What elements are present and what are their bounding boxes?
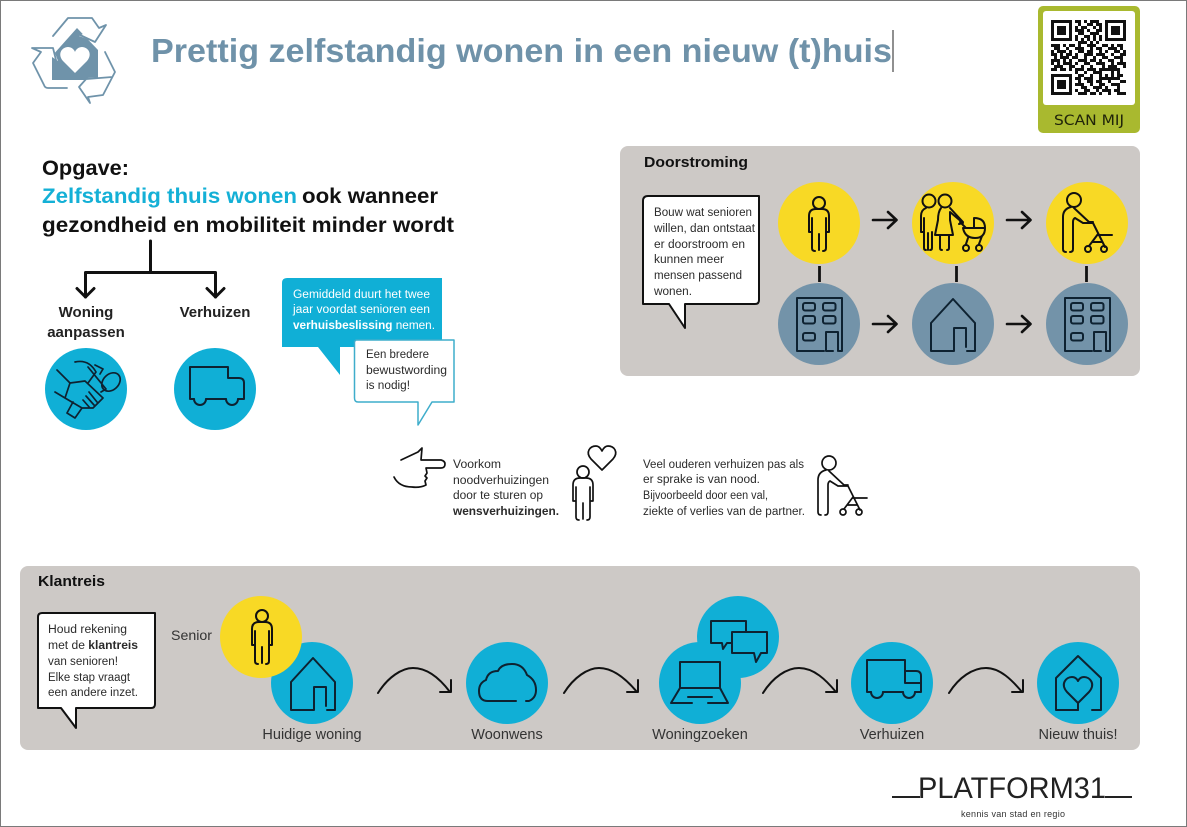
icon: senior person — [220, 596, 302, 678]
text: veel ouderen verhuizen: Veel ouderen verhuizen pas als — [643, 459, 804, 471]
arrows: customer journey — [378, 668, 1023, 693]
callout: verhuisbeslissing — [282, 278, 442, 375]
step: woonwens: Woonwens — [471, 727, 543, 743]
arrows: life stages and housing — [873, 212, 1030, 332]
callout: bouw wat senioren: mensen passend — [654, 270, 742, 282]
text: veel ouderen verhuizen: Bijvoorbeeld door een val, — [643, 490, 768, 502]
icon: pointing hand — [394, 448, 445, 487]
callout: verhuisbeslissing: jaar voordat senioren een — [292, 304, 430, 316]
logo: platform31 — [892, 772, 1132, 819]
text: voorkom noodverhuizingen: door te sturen op — [453, 490, 543, 502]
callout: bouw wat senioren: er doorstroom en — [654, 239, 745, 251]
step: verhuizen — [851, 642, 933, 743]
title: Prettig zelfstandig wonen in een nieuw (t)huis — [151, 32, 892, 69]
text: voorkom noodverhuizingen: noodverhuizingen — [453, 475, 549, 487]
icon: recycling house logo — [32, 18, 115, 103]
heading: klantreis: Klantreis — [38, 574, 105, 590]
callout: bouw wat senioren: willen, dan ontstaat — [653, 223, 756, 235]
icon: house — [912, 283, 994, 365]
icon: elderly with walker — [1046, 182, 1128, 264]
callout: houd rekening: een andere inzet. — [48, 687, 138, 699]
callout: houd rekening: met de klantreis — [48, 640, 138, 652]
arrow: tree branching to two options — [77, 241, 224, 297]
icon: person with heart — [573, 446, 616, 520]
text: veel ouderen verhuizen — [643, 459, 805, 518]
connectors between rows — [820, 266, 1086, 282]
text: veel ouderen verhuizen: ziekte of verlies van de partner. — [643, 506, 805, 518]
callout: bouw wat senioren — [643, 196, 759, 328]
text: voorkom noodverhuizingen: Voorkom — [453, 459, 501, 471]
icon: elderly with walker — [818, 456, 867, 515]
step: woningzoeken — [652, 596, 779, 743]
QR code card — [1038, 6, 1140, 133]
callout: houd rekening: Elke stap vraagt — [48, 672, 131, 684]
logo: platform31: kennis van stad en regio — [961, 809, 1065, 819]
callout: bouw wat senioren: Bouw wat senioren — [654, 207, 752, 219]
heading: ook wanneer: ook wanneer — [302, 185, 438, 208]
panel: doorstroming — [620, 146, 1140, 376]
icon: apartment building — [778, 283, 860, 365]
logo: platform31: PLATFORM31 — [918, 772, 1106, 805]
text cursor — [892, 30, 894, 72]
callout: bouw wat senioren: kunnen meer — [654, 254, 724, 266]
callout: houd rekening: Houd rekening — [48, 624, 127, 636]
callout: verhuisbeslissing: verhuisbeslissing nemen. — [293, 320, 435, 332]
step: verhuizen: Verhuizen — [860, 727, 924, 743]
icon: single person — [778, 182, 860, 264]
callout: houd rekening: van senioren! — [48, 656, 118, 668]
callout: houd rekening — [38, 613, 155, 728]
icon: apartment building 2 — [1046, 283, 1128, 365]
heading: Opgave: Opgave: — [42, 157, 129, 180]
label: woning aanpassen: Woning — [59, 304, 113, 321]
callout: bouw wat senioren: wonen. — [653, 286, 692, 298]
callout: bredere bewustwording: is nodig! — [366, 380, 410, 392]
panel: klantreis — [20, 566, 1140, 750]
step: huidige woning: Huidige woning — [262, 727, 362, 743]
label: senior: Senior — [171, 627, 212, 643]
label: verhuizen: Verhuizen — [180, 304, 250, 321]
step: huidige woning — [262, 642, 362, 743]
callout: bredere bewustwording: bewustwording — [366, 365, 447, 377]
heading: doorstroming: Doorstroming — [644, 155, 748, 171]
label: woning aanpassen: aanpassen — [47, 324, 125, 341]
icon: handshake — [45, 348, 127, 430]
QR code card: SCAN MIJ — [1054, 113, 1124, 129]
step: woonwens — [466, 642, 548, 743]
icon: family with stroller — [912, 182, 994, 264]
callout: bredere bewustwording — [354, 340, 454, 425]
heading: gezondheid en mobiliteit minder wordt: gezondheid en mobiliteit minder wordt — [42, 214, 454, 237]
callout: verhuisbeslissing: Gemiddeld duurt het twee — [293, 289, 430, 301]
callout: bredere bewustwording: Een bredere — [366, 349, 429, 361]
text: voorkom noodverhuizingen — [452, 459, 559, 518]
text: veel ouderen verhuizen: er sprake is van nood. — [643, 474, 760, 486]
icon: moving truck — [174, 348, 256, 430]
step: woningzoeken: Woningzoeken — [652, 727, 748, 743]
text: voorkom noodverhuizingen: wensverhuizingen. — [452, 506, 559, 518]
heading: zelfstandig thuis wonen: Zelfstandig thuis wonen — [42, 185, 297, 208]
step: nieuw thuis — [1037, 642, 1119, 743]
step: nieuw thuis: Nieuw thuis! — [1039, 727, 1117, 743]
